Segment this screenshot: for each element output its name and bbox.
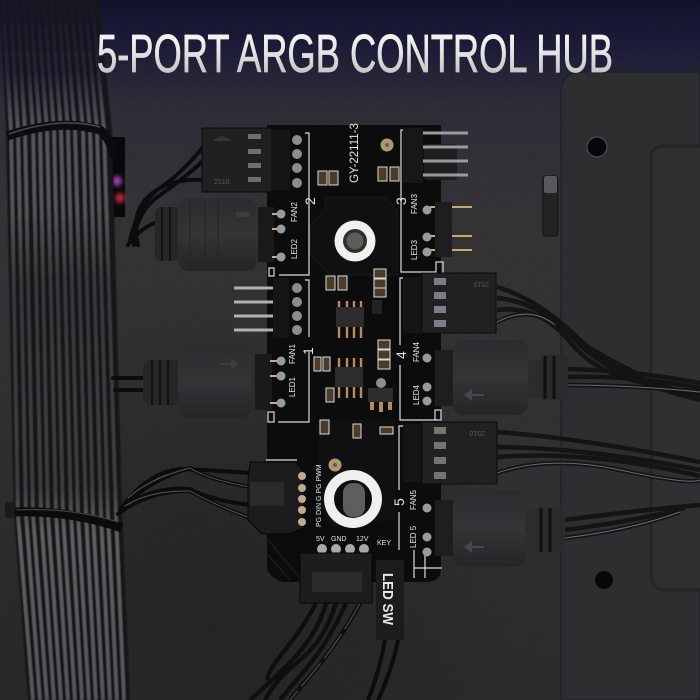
board text labels: FAN1 — [288, 343, 297, 364]
connector: FAN2 housing: 2510 — [214, 179, 230, 186]
board text labels: LED 5 — [409, 525, 418, 548]
cables right — [497, 287, 700, 538]
board text labels — [288, 123, 421, 548]
chip U3 — [336, 301, 364, 338]
board text labels: GY-22111-3 — [349, 123, 361, 183]
connector: LED3 header — [422, 202, 472, 257]
connector: bottom power — [300, 544, 372, 603]
board text labels: PG DIN G PG PWM — [316, 464, 323, 527]
connector: LED2 plug — [155, 198, 286, 271]
connector: FAN2 housing — [202, 128, 302, 192]
board text labels: FAN2 — [290, 201, 299, 222]
board text labels: LED2 — [290, 238, 299, 259]
connector: FAN4 housing: 2510 — [473, 280, 489, 287]
board text labels: GND — [331, 536, 347, 543]
cable bundle left — [0, 0, 130, 700]
board text labels: KEY — [377, 540, 391, 547]
panel: case mounting plate — [561, 72, 700, 700]
silkscreen outlines — [266, 130, 443, 578]
board text labels: LED1 — [288, 376, 297, 397]
pink glow slot — [112, 137, 125, 217]
panel: circuit board — [267, 125, 441, 582]
transistor U1 — [368, 378, 393, 412]
passive components — [314, 167, 399, 438]
board text labels: 1 — [300, 347, 316, 355]
board text labels: 5 — [391, 498, 407, 506]
board text labels: 5V — [316, 536, 325, 543]
cables left — [113, 146, 250, 518]
transistor VT1 — [372, 300, 382, 314]
test pads — [328, 138, 394, 472]
connector: FAN1 header — [234, 278, 302, 338]
connector: LED5 plug — [422, 490, 564, 567]
connector: PWM power — [248, 462, 306, 534]
mounting ring bottom — [324, 470, 382, 528]
board text labels: LED4 — [412, 384, 421, 405]
board text labels: FAN3 — [410, 193, 419, 214]
board text labels: 4 — [393, 351, 409, 359]
connector: FAN5 housing: 2510 — [469, 429, 485, 436]
connector: FAN5 housing — [403, 422, 497, 484]
icon: case side clip — [543, 176, 558, 236]
connector: LED1 plug — [143, 345, 286, 418]
connector: FAN4 housing — [403, 273, 496, 333]
connector: FAN3 header — [403, 128, 468, 183]
cables bottom — [250, 603, 398, 700]
connector: LED4 plug — [422, 340, 568, 415]
cable ties — [5, 123, 122, 528]
board text labels: FAN4 — [412, 341, 421, 362]
mounting ring top — [334, 220, 376, 262]
chip U2 — [335, 358, 363, 398]
board text labels: 12V — [356, 536, 369, 543]
connector: LED switch cable: LED SW — [379, 573, 395, 625]
board text labels: FAN5 — [409, 489, 418, 510]
board text labels: 3 — [393, 197, 409, 205]
board text labels: LED3 — [410, 239, 419, 260]
board text labels: 2 — [302, 197, 318, 205]
connector: LED switch cable — [376, 560, 404, 640]
